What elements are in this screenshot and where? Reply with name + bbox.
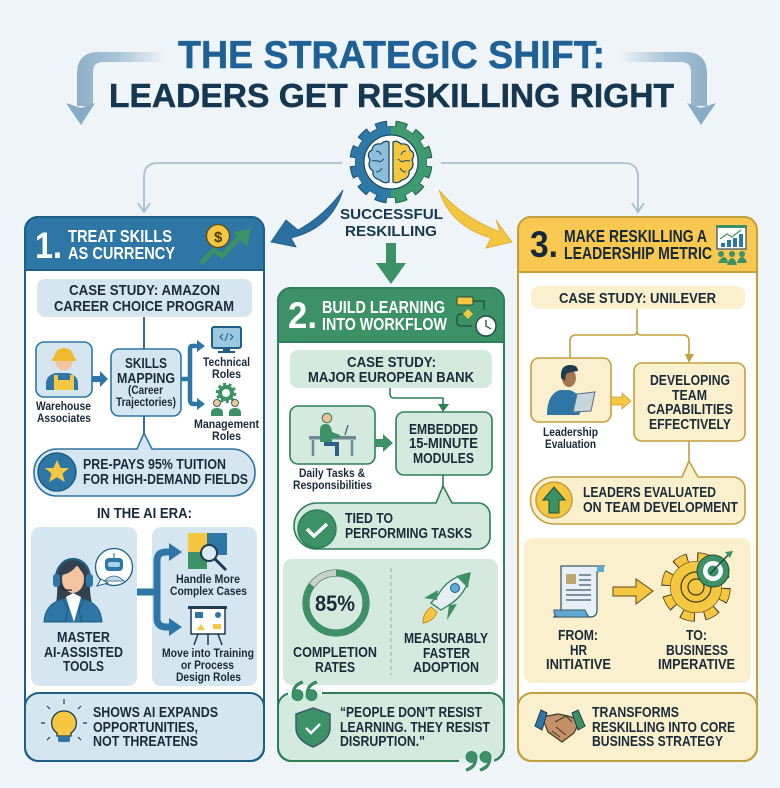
header 3: MAKE RESKILLING A (564, 226, 707, 246)
daily tasks: Responsibilities (293, 478, 372, 492)
callout: tuition (34, 433, 255, 496)
callout: leaders evaluated: LEADERS EVALUATED (583, 484, 716, 501)
header 1: TREAT SKILLS (68, 226, 172, 246)
warehouse associates: Warehouse (36, 399, 91, 413)
panel: results (283, 559, 498, 685)
leadership evaluation (531, 358, 611, 451)
technical roles label: Technical (203, 355, 250, 369)
header 2: INTO WORKFLOW (322, 314, 447, 334)
capabilities box: DEVELOPING (650, 372, 730, 389)
quote box (278, 681, 504, 771)
arrow: to panel 3 (439, 190, 512, 248)
connector: case to modules (390, 388, 449, 412)
title (109, 34, 674, 114)
icon: robot bubble (96, 548, 132, 586)
embedded modules box: 15-MINUTE (409, 435, 478, 452)
connector: hub to panel 3 (441, 163, 644, 212)
technical roles label (203, 355, 250, 381)
icon: gear with target (666, 551, 733, 617)
embedded modules box (396, 412, 492, 475)
daily tasks (290, 406, 375, 492)
icon: gear with brain (354, 125, 428, 199)
from label (546, 627, 611, 673)
completion rates label: COMPLETION (293, 644, 377, 661)
move into training label (162, 646, 254, 684)
case study box: CAREER CHOICE PROGRAM (54, 298, 234, 315)
skills mapping box (111, 349, 181, 416)
arrow: role branches (181, 340, 205, 410)
takeaway box (518, 693, 757, 761)
move into training label: Design Roles (176, 670, 241, 684)
hub label (340, 206, 443, 240)
warehouse associates (36, 342, 92, 425)
panel: from HR to business (524, 538, 751, 683)
arrow: AI branches (137, 543, 182, 636)
icon: workflow clock (457, 297, 496, 336)
skills mapping box: (Career (128, 383, 163, 397)
case study box (531, 286, 745, 309)
arrow: to capabilities (611, 393, 631, 409)
takeaway box: NOT THREATENS (93, 733, 198, 750)
faster adoption label (404, 630, 488, 676)
callout: leaders evaluated (530, 461, 745, 524)
takeaway box: OPPORTUNITIES, (93, 719, 198, 736)
panel 2: build learning into workflow (278, 288, 504, 771)
panel: master AI tools: TOOLS (63, 658, 104, 675)
arrow: to panel 2 (376, 243, 406, 284)
callout: tied to tasks: TIED TO (345, 510, 393, 527)
handle complex cases label (170, 572, 247, 598)
hub label: RESKILLING (345, 223, 437, 240)
panel: new role paths (152, 527, 257, 686)
title: THE STRATEGIC SHIFT: (178, 34, 605, 77)
arrow: to skills mapping (92, 371, 108, 387)
leadership evaluation: Evaluation (545, 437, 596, 451)
takeaway box: BUSINESS STRATEGY (592, 733, 723, 750)
header 3: 3. (530, 224, 558, 265)
handle complex cases label: Handle More (176, 572, 240, 586)
capabilities box: TEAM (672, 387, 707, 404)
handle complex cases label: Complex Cases (170, 584, 247, 598)
arrow: to panel 1 (271, 190, 343, 247)
icon: coin and growth arrow: $ (214, 229, 223, 246)
takeaway box: RESKILLING INTO CORE (592, 719, 735, 736)
icon: support agent (44, 559, 102, 622)
management roles label: Roles (212, 429, 241, 443)
case study box (37, 279, 252, 317)
to label: BUSINESS (666, 642, 728, 659)
panel 1: treat skills as currency (25, 217, 264, 761)
icon: opening quote mark (292, 681, 317, 701)
case study box: CASE STUDY: AMAZON (69, 282, 220, 299)
connector: case to boxes (570, 309, 694, 363)
donut chart: 85% (306, 573, 366, 633)
header 3: LEADERSHIP METRIC (564, 243, 712, 263)
header 2: BUILD LEARNING (322, 297, 445, 317)
embedded modules box: MODULES (413, 450, 474, 467)
from label: HR (570, 642, 587, 659)
icon: handshake (535, 710, 585, 742)
panel: master AI tools (31, 527, 137, 686)
connector: hub to panel 1 (138, 163, 342, 212)
embedded modules box: EMBEDDED (409, 421, 478, 438)
icon: rocket (423, 573, 470, 623)
panel 3: leadership metric (518, 217, 757, 761)
takeaway box (25, 693, 264, 761)
from label: FROM: (558, 627, 598, 644)
management roles label: Management (194, 417, 259, 431)
takeaway box: SHOWS AI EXPANDS (93, 704, 218, 721)
completion rates label: RATES (315, 659, 355, 676)
capabilities box: EFFECTIVELY (649, 416, 731, 433)
icon: puzzle and magnifier (188, 533, 227, 570)
icon: coin and growth arrow (201, 224, 251, 263)
header 1: AS CURRENCY (68, 243, 175, 263)
header 3 (518, 217, 757, 272)
capabilities box: CAPABILITIES (647, 401, 733, 418)
callout: tuition: PRE-PAYS 95% TUITION (83, 456, 226, 473)
icon: closing quote mark (466, 751, 491, 771)
takeaway box: TRANSFORMS (592, 704, 679, 721)
header 2: 2. (288, 295, 317, 336)
quote box: “PEOPLE DON'T RESIST (340, 704, 482, 721)
completion rates label (293, 644, 377, 676)
icon: management gear and people (211, 384, 241, 416)
icon: scroll (554, 566, 604, 617)
skills mapping box: SKILLS (125, 355, 167, 372)
arrow: title right (620, 52, 716, 125)
callout: tied to tasks: PERFORMING TASKS (345, 525, 472, 542)
technical roles label: Roles (212, 367, 241, 381)
faster adoption label: FASTER (423, 645, 470, 662)
icon: monitor (212, 327, 241, 353)
header 2 (278, 288, 504, 342)
hub label: SUCCESSFUL (340, 206, 443, 223)
header 1 (25, 217, 264, 270)
faster adoption label: MEASURABLY (404, 630, 488, 647)
icon: presentation board (188, 606, 227, 645)
skills mapping box: MAPPING (117, 370, 175, 387)
header 1: 1. (35, 225, 62, 266)
icon: light bulb (41, 699, 87, 742)
case study box (290, 350, 492, 388)
callout: tuition: FOR HIGH-DEMAND FIELDS (83, 471, 248, 488)
subheading: IN THE AI ERA: (97, 505, 192, 522)
title: LEADERS GET RESKILLING RIGHT (109, 77, 674, 114)
from label: INITIATIVE (546, 656, 611, 673)
case study box: CASE STUDY: (347, 354, 436, 371)
icon: metrics board and team (716, 225, 747, 265)
quote box: DISRUPTION." (340, 733, 425, 750)
to label: IMPERATIVE (658, 656, 735, 673)
daily tasks: Daily Tasks & (299, 466, 365, 480)
donut chart: 85%: 85% (315, 591, 355, 616)
arrow: from to (613, 579, 653, 604)
arrow: to modules (375, 434, 393, 452)
move into training label: Move into Training (162, 646, 254, 660)
panel: master AI tools: MASTER (57, 629, 110, 646)
management roles label (194, 417, 259, 443)
callout: tied to tasks (294, 486, 490, 549)
icon: shield (296, 708, 330, 747)
quote box: LEARNING. THEY RESIST (340, 719, 490, 736)
leadership evaluation: Leadership (543, 425, 598, 439)
case study box: MAJOR EUROPEAN BANK (308, 369, 474, 386)
to label (658, 627, 735, 673)
faster adoption label: ADOPTION (413, 659, 479, 676)
to label: TO: (686, 627, 707, 644)
callout: leaders evaluated: ON TEAM DEVELOPMENT (583, 499, 738, 516)
move into training label: or Process (181, 658, 234, 672)
warehouse associates: Associates (37, 411, 91, 425)
arrow: title left (66, 52, 165, 125)
case study box: CASE STUDY: UNILEVER (559, 290, 716, 307)
capabilities box (634, 363, 745, 441)
panel: master AI tools: AI-ASSISTED (44, 644, 123, 661)
skills mapping box: Trajectories) (116, 395, 176, 409)
